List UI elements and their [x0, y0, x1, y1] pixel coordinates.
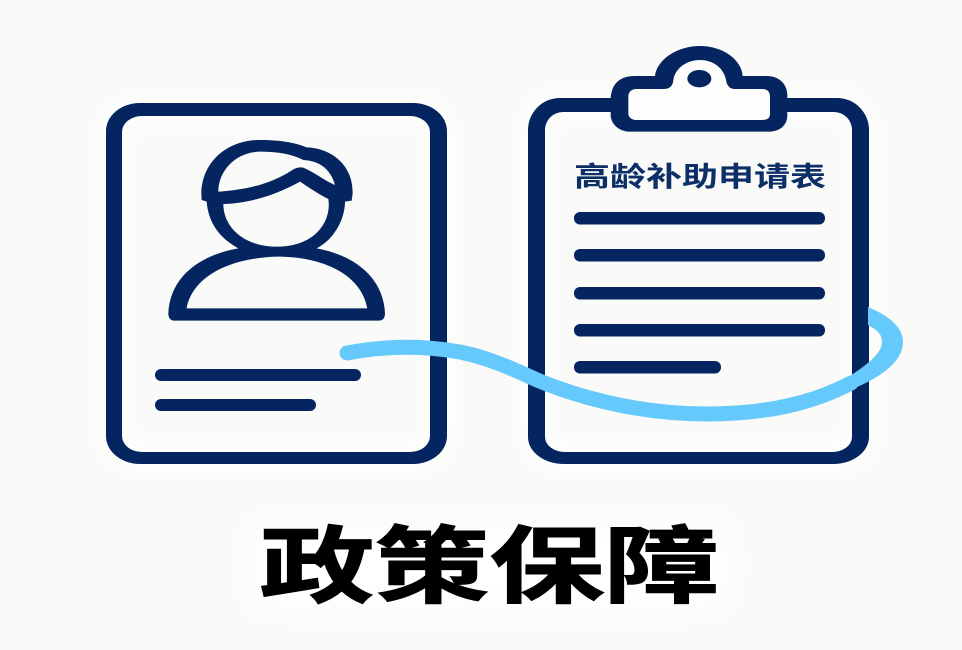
- icon: clipboard clip: [611, 46, 787, 132]
- arrow: connecting curve: [347, 307, 903, 414]
- form title: 高龄补助申请表: [574, 161, 826, 192]
- panel: ID card: [106, 103, 447, 464]
- form lines: [574, 212, 825, 374]
- card text lines: [155, 369, 361, 411]
- panel: clipboard application form: [528, 46, 869, 464]
- title: 政策保障: [260, 521, 719, 614]
- icon: person: [168, 140, 385, 321]
